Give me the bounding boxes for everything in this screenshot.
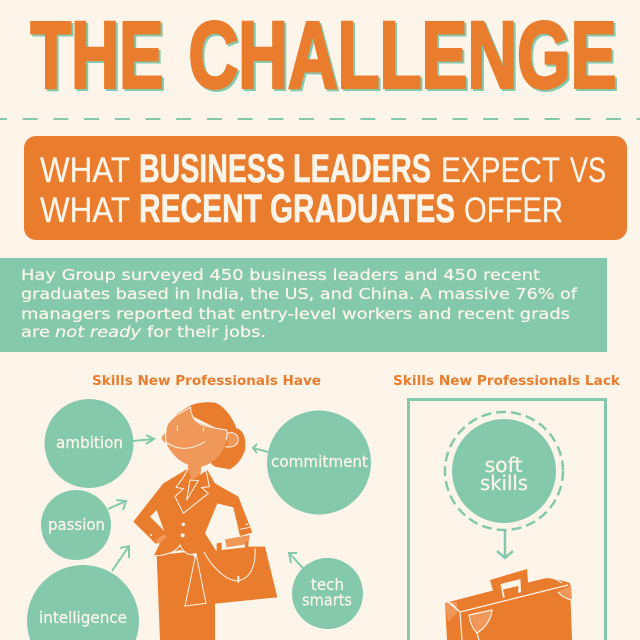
intro text panel: are xyxy=(21,323,50,341)
suitcase body xyxy=(445,569,572,640)
intro text panel: not ready xyxy=(55,323,142,341)
intro text panel: managers reported that entry-level workers and recent grads xyxy=(21,305,570,323)
left hand xyxy=(155,534,167,544)
face xyxy=(161,409,227,467)
neck and blouse xyxy=(185,465,202,502)
hair xyxy=(175,402,245,469)
circle: ambition xyxy=(44,399,134,488)
heading: skills have: Skills New Professionals Have xyxy=(92,374,321,389)
circle: passion: passion xyxy=(48,515,105,534)
banner xyxy=(24,136,627,240)
icon: suitcase xyxy=(445,569,572,640)
banner: EXPECT xyxy=(441,151,560,190)
banner: WHAT xyxy=(40,191,130,230)
intro text panel xyxy=(0,258,607,352)
banner: RECENT xyxy=(139,187,262,231)
heading: skills lack: Skills New Professionals Lack xyxy=(393,374,620,389)
banner: VS xyxy=(570,151,606,190)
handle hole xyxy=(500,579,521,598)
briefcase xyxy=(185,541,277,607)
circle: soft skills: soft xyxy=(484,453,523,477)
circle: passion xyxy=(41,490,111,560)
title xyxy=(30,2,618,110)
arrows to figure xyxy=(108,435,303,571)
banner: WHAT xyxy=(40,151,130,190)
corner patches xyxy=(445,602,457,622)
jacket xyxy=(133,468,252,557)
intro text panel: for their jobs. xyxy=(147,323,266,341)
circle: tech smarts: tech xyxy=(311,575,344,594)
circle: commitment: commitment xyxy=(271,452,368,471)
title: THE xyxy=(32,4,166,110)
circle: soft skills xyxy=(445,412,563,530)
intro text panel: Hay Group surveyed 450 business leaders and 450 recent xyxy=(21,266,540,284)
circle: tech smarts: smarts xyxy=(302,590,352,610)
banner: LEADERS xyxy=(293,147,431,191)
figure: businesswoman xyxy=(133,402,277,640)
title: THE xyxy=(30,2,164,108)
ear xyxy=(227,433,238,447)
pants xyxy=(157,552,215,640)
banner: BUSINESS xyxy=(139,147,285,191)
banner: OFFER xyxy=(464,191,563,230)
circle: commitment xyxy=(267,410,371,514)
circle: intelligence: intelligence xyxy=(39,608,127,627)
intro text panel: graduates based in India, the US, and China. A massive 76% of xyxy=(21,285,578,303)
circle: intelligence xyxy=(27,565,139,640)
circle: tech smarts xyxy=(292,558,363,629)
panel: skills lacking frame xyxy=(408,400,606,640)
circle: soft skills: skills xyxy=(480,471,528,495)
arrow: down to suitcase xyxy=(497,531,513,558)
right hand xyxy=(225,535,250,547)
circle: ambition: ambition xyxy=(56,433,123,452)
banner: GRADUATES xyxy=(270,187,455,231)
